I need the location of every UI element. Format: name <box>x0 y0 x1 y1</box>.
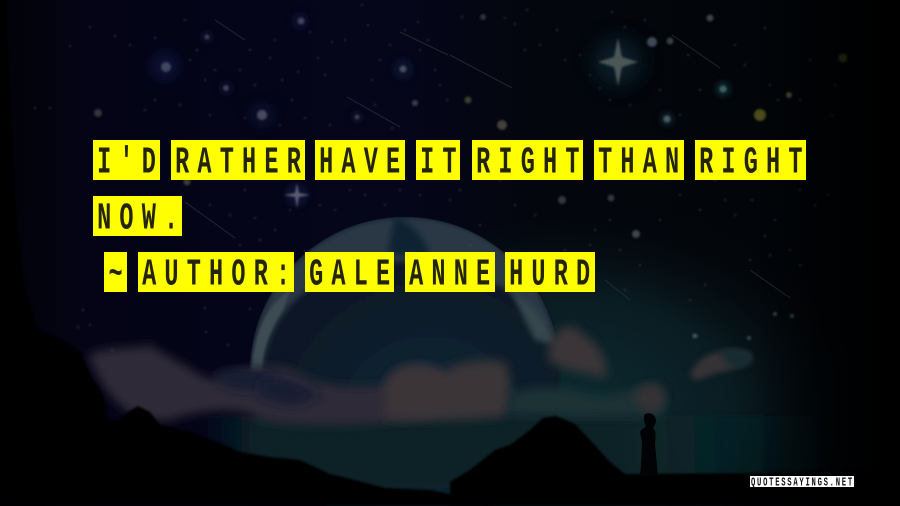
clouds <box>88 326 753 425</box>
quote line 1: THAN <box>598 143 687 185</box>
quote line 1: IT <box>420 143 465 185</box>
right ridge silhouette <box>450 416 900 506</box>
watermark: QUOTESSAYINGS.NET <box>751 476 854 489</box>
quote line 1: RATHER <box>175 143 309 185</box>
quote line 1: RIGHT <box>699 143 811 185</box>
author line: ~ <box>108 255 131 297</box>
shooting stars <box>185 20 790 300</box>
quote line 1: I'D <box>97 143 164 185</box>
author line: GALE <box>309 255 398 297</box>
quote line 1: HAVE <box>319 143 408 185</box>
quote line 2: NOW. <box>97 199 186 241</box>
quote line 1 <box>93 140 811 185</box>
small star field <box>35 5 898 350</box>
planet <box>250 216 560 506</box>
author line: ANNE <box>409 255 498 297</box>
author line <box>104 252 598 297</box>
author line: HURD <box>509 255 598 297</box>
standing figure silhouette <box>640 413 658 476</box>
bright stars <box>94 12 848 340</box>
sea <box>200 416 840 488</box>
left mountains silhouette <box>0 0 500 506</box>
quote line 1: RIGHT <box>476 143 588 185</box>
author line: AUTHOR: <box>142 255 298 297</box>
teal horizon glow <box>200 220 900 506</box>
right edge vignette <box>760 0 900 506</box>
